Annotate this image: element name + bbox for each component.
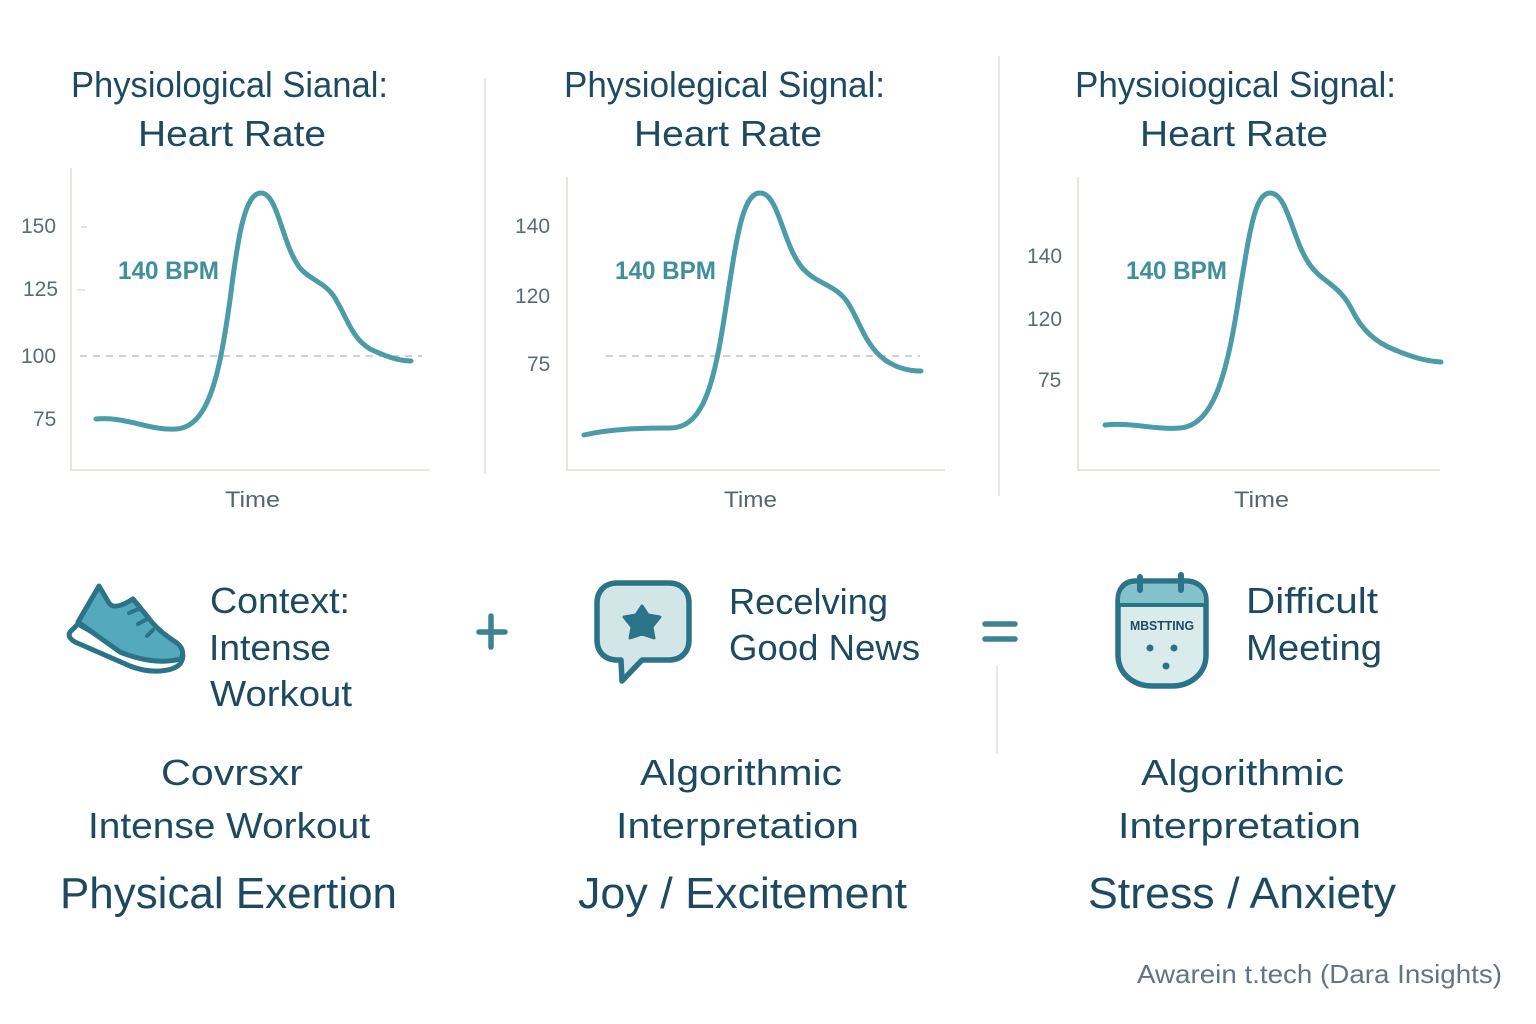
heading: physiological signal 1: Heart Rate bbox=[138, 113, 326, 154]
icon: speech bubble with star bbox=[597, 583, 689, 681]
heading: physiological signal 2: Heart Rate bbox=[634, 113, 822, 154]
line chart: heart rate 3 bbox=[1027, 177, 1441, 512]
text: context interpretation: Intense Workout bbox=[88, 805, 370, 846]
icon: meeting calendar bbox=[1118, 575, 1206, 686]
text: algorithmic interpretation 2: Interpretation bbox=[1118, 805, 1361, 846]
line chart: heart rate 3: 75 bbox=[1038, 369, 1061, 392]
result: stress anxiety: Stress / Anxiety bbox=[1088, 869, 1396, 918]
text: receiving good news bbox=[729, 581, 920, 668]
line chart: heart rate 2: 140 BPM bbox=[615, 257, 716, 285]
line chart: heart rate 3: 120 bbox=[1027, 308, 1062, 331]
heading: physiological signal 2 bbox=[564, 64, 885, 154]
line chart: heart rate 2: 120 bbox=[515, 285, 550, 308]
line chart: heart rate 1: 150 bbox=[21, 215, 56, 238]
text: context intense workout: Workout bbox=[210, 673, 352, 714]
line chart: heart rate 3: 140 BPM bbox=[1126, 257, 1227, 285]
line chart: heart rate 1: 100 bbox=[21, 345, 56, 368]
text: context intense workout: Intense bbox=[209, 627, 331, 668]
line chart: heart rate 1: Time bbox=[225, 487, 280, 512]
panel: chart column 1 bbox=[21, 64, 430, 512]
text: context intense workout: Context: bbox=[210, 580, 350, 621]
icon: running shoe bbox=[69, 586, 183, 671]
line chart: heart rate 3: Time bbox=[1234, 487, 1289, 512]
result: joy excitement: Joy / Excitement bbox=[578, 869, 907, 918]
heading: physiological signal 1 bbox=[71, 64, 388, 154]
text: difficult meeting: Meeting bbox=[1246, 627, 1382, 668]
icon: plus bbox=[479, 616, 505, 647]
text: receiving good news: Good News bbox=[729, 627, 920, 668]
result: physical exertion: Physical Exertion bbox=[60, 869, 397, 918]
line chart: heart rate 1: 125 bbox=[23, 278, 58, 301]
line chart: heart rate 2 bbox=[515, 177, 945, 512]
text: context interpretation: Covrsxr bbox=[161, 752, 303, 793]
line chart: heart rate 2: Time bbox=[724, 487, 777, 512]
line chart: heart rate 2: 140 bbox=[515, 215, 550, 238]
text: difficult meeting: Difficult bbox=[1246, 580, 1378, 621]
panel: chart column 3 bbox=[1027, 64, 1441, 512]
text: algorithmic interpretation 1: Interpretation bbox=[616, 805, 859, 846]
line chart: heart rate 1: 140 BPM bbox=[118, 257, 219, 285]
text: algorithmic interpretation 2 bbox=[1118, 752, 1361, 846]
text: context interpretation bbox=[88, 752, 370, 846]
heading: physiological signal 3: Physioiogical Signal: bbox=[1075, 64, 1396, 105]
heading: physiological signal 2: Physiolegical Signal: bbox=[564, 64, 885, 105]
text: context intense workout bbox=[209, 580, 352, 714]
line chart: heart rate 1 bbox=[21, 168, 430, 512]
text: difficult meeting bbox=[1246, 580, 1382, 668]
icon: equals bbox=[985, 624, 1015, 639]
text: algorithmic interpretation 1: Algorithmic bbox=[640, 752, 842, 793]
line chart: heart rate 2: 75 bbox=[527, 353, 550, 376]
heading: physiological signal 1: Physiological Sianal: bbox=[71, 64, 388, 105]
text: algorithmic interpretation 1 bbox=[616, 752, 859, 846]
panel: chart column 2 bbox=[515, 64, 945, 512]
text: algorithmic interpretation 2: Algorithmic bbox=[1141, 752, 1344, 793]
icon: meeting calendar: MBSTTING bbox=[1130, 618, 1194, 633]
line chart: heart rate 3: 140 bbox=[1027, 245, 1062, 268]
heading: physiological signal 3: Heart Rate bbox=[1140, 113, 1328, 154]
text: receiving good news: Recelving bbox=[729, 581, 888, 622]
heading: physiological signal 3 bbox=[1075, 64, 1396, 154]
line chart: heart rate 1: 75 bbox=[33, 408, 56, 431]
source credit: Awarein t.tech (Dara Insights) bbox=[1137, 959, 1502, 989]
